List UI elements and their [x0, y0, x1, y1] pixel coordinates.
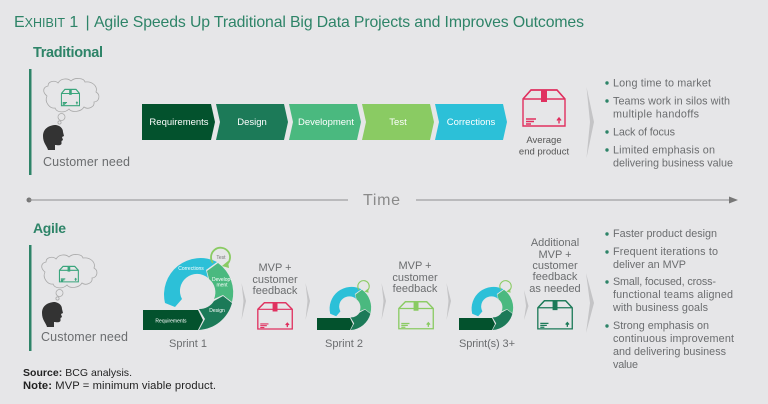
agile bullets: Strong emphasis on [613, 320, 709, 332]
time axis [26, 192, 738, 209]
label: additional mvp feedback: MVP + [538, 249, 572, 261]
label: mvp feedback 1: MVP + [258, 262, 292, 274]
step: requirements: Requirements [149, 117, 209, 128]
label: sprint 3: Sprint(s) 3+ [459, 338, 515, 350]
label: additional mvp feedback: as needed [529, 283, 581, 295]
agile bullets: Small, focused, cross- [613, 276, 716, 288]
title: EXHIBIT 1 [14, 14, 78, 31]
sprint 1 ring [143, 248, 233, 330]
heading: agile: Agile [33, 220, 66, 236]
agile bullets: with business goals [612, 302, 709, 314]
label: average end product: end product [519, 146, 569, 158]
icon: customer thought [43, 78, 99, 150]
traditional bullets: multiple handoffs [613, 108, 700, 120]
panel: traditional [29, 45, 733, 175]
sprint 1 ring: Requirements [155, 318, 187, 324]
sprint 1 ring: Test [216, 255, 226, 261]
traditional bullets: Teams work in silos with [613, 96, 730, 108]
label: sprint 2: Sprint 2 [325, 338, 363, 350]
arrow [306, 283, 310, 320]
step: test: Test [389, 117, 407, 128]
step: test [362, 104, 434, 140]
title: Agile Speeds Up Traditional Big Data Projects and Improves Outcomes [94, 14, 584, 31]
step: design [216, 104, 288, 140]
step: development: Development [298, 117, 354, 128]
icon: light green box [399, 302, 433, 329]
sprint 1 ring: Corrections [178, 266, 204, 272]
label: additional mvp feedback: customer [532, 260, 578, 272]
accent bar [29, 69, 32, 175]
step: corrections: Corrections [447, 117, 496, 128]
icon: dark green box [538, 301, 572, 329]
title: | [86, 14, 90, 31]
sprint 3 ring [459, 281, 513, 330]
sprint 1 ring: ment [216, 282, 228, 288]
agile bullets: Faster product design [613, 228, 717, 240]
label: mvp feedback 1: feedback [253, 285, 298, 297]
label: customer need: Customer need [41, 330, 128, 344]
label: mvp feedback 2: feedback [393, 283, 438, 295]
agile bullets: deliver an MVP [613, 259, 686, 271]
time axis: Time [363, 192, 400, 209]
arrow [446, 283, 451, 320]
label: mvp feedback 2: MVP + [398, 260, 432, 272]
sprint 2 ring [317, 281, 371, 330]
heading: traditional: Traditional [33, 45, 103, 61]
step: corrections [435, 104, 507, 140]
arrow: traditional outcomes [586, 87, 594, 158]
sprint 1 ring: Develop- [212, 277, 232, 283]
arrow: agile outcomes [586, 273, 594, 333]
traditional bullets: Lack of focus [613, 126, 676, 138]
traditional bullets: Limited emphasis on [613, 144, 715, 156]
agile bullets: and delivering business [613, 346, 727, 358]
agile bullets: Frequent iterations to [613, 246, 718, 258]
label: additional mvp feedback: feedback [533, 271, 578, 283]
source and note: Note: MVP = minimum viable product. [23, 380, 216, 392]
label: additional mvp feedback: Additional [531, 237, 579, 249]
label: mvp feedback 2: customer [392, 272, 438, 284]
source and note: Source: BCG analysis. [23, 367, 132, 379]
sprint 1 ring: Design [209, 308, 225, 314]
step: design: Design [237, 117, 267, 128]
agile bullets: continuous improvement [613, 333, 734, 345]
agile bullets: functional teams aligned [613, 289, 733, 301]
icon: average end product box [523, 90, 565, 126]
label: mvp feedback 1: customer [252, 274, 298, 286]
agile bullets [605, 228, 734, 371]
accent bar [29, 245, 32, 351]
agile bullets: value [613, 359, 638, 371]
icon: red box [258, 303, 292, 329]
source and note [23, 367, 216, 392]
traditional bullets: delivering business value [613, 158, 733, 170]
icon: customer thought [42, 254, 97, 327]
label: average end product: Average [526, 135, 562, 146]
step: development [289, 104, 361, 140]
label: sprint 1: Sprint 1 [169, 338, 207, 350]
arrow [382, 283, 386, 320]
label: customer need: Customer need [43, 155, 130, 169]
traditional bullets: Long time to market [613, 78, 711, 90]
arrow [242, 283, 246, 320]
process chevrons [142, 104, 507, 140]
traditional bullets [605, 78, 733, 170]
arrow [524, 290, 528, 320]
panel: agile [29, 220, 734, 371]
step: requirements [142, 104, 215, 140]
